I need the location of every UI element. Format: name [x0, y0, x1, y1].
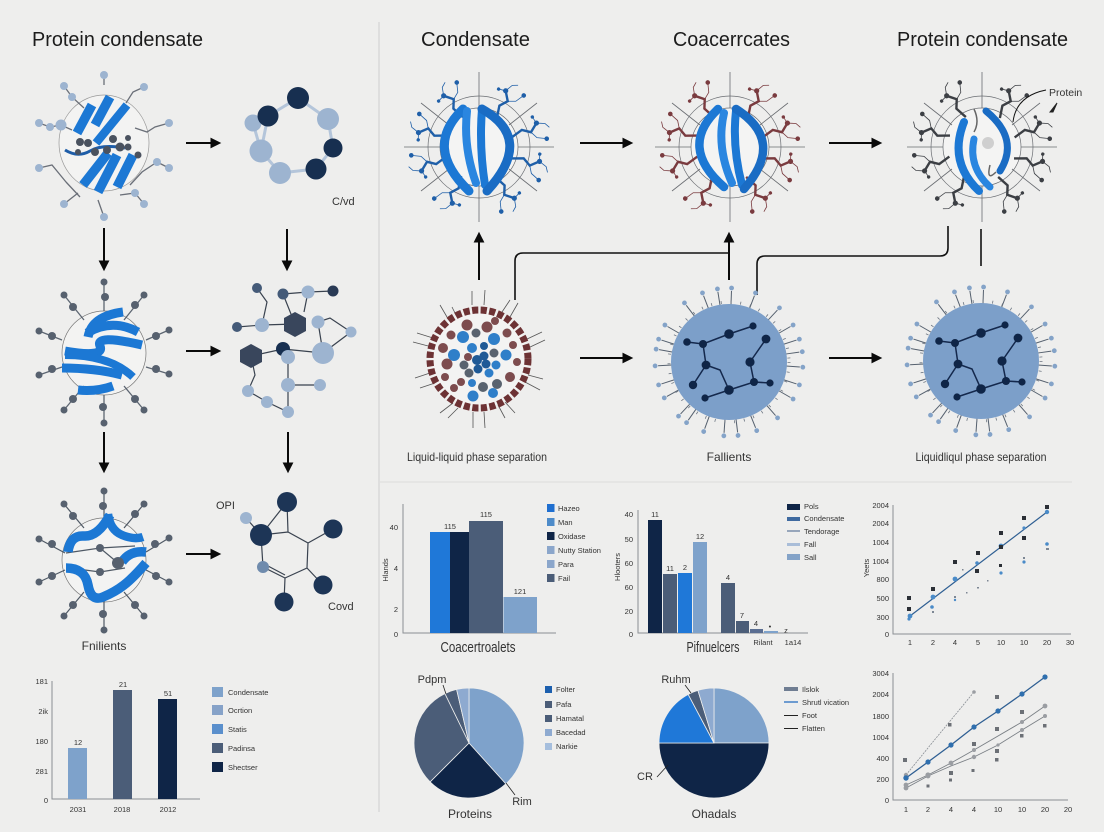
scatter chart: bottom right: 3004 [872, 669, 889, 678]
arrow [829, 357, 879, 359]
bar chart: coacertroalets: 4 [394, 564, 398, 573]
molecule: ring structure [244, 87, 342, 184]
scatter chart: top right: 1 [908, 638, 912, 647]
bar chart: coacertroalets: 40 [390, 523, 398, 532]
bar chart: pifnuelcers: 11 [651, 510, 659, 519]
bar chart: pifnuelcers: 1a14 [785, 638, 801, 647]
bar chart: bottom left: 21 [119, 680, 127, 689]
legend: ohadals: Ilslok [802, 685, 819, 694]
legend: ohadals: Foot [802, 711, 818, 720]
bar chart: bottom left: 2018 [114, 805, 130, 814]
legend: coacertroalets: Man [558, 518, 573, 527]
scatter chart: bottom right [872, 669, 1072, 814]
scatter chart: bottom right: 20 [1064, 805, 1072, 814]
bar chart: bottom left: 2031 [70, 805, 86, 814]
scatter chart: bottom right: 200 [876, 775, 889, 784]
bar chart: coacertroalets: 115 [480, 510, 492, 519]
legend: pifnuelcers [787, 502, 844, 562]
legend: ohadals [784, 685, 849, 733]
label: left filaments: Fnilients [82, 639, 126, 653]
bar chart: pifnuelcers: 60 [625, 559, 633, 568]
arrow [580, 142, 630, 144]
molecule: beta sheet protein, top left [35, 71, 173, 221]
legend: pifnuelcers: Condensate [804, 514, 844, 523]
bar chart: pifnuelcers: 20 [625, 607, 633, 616]
arrow [103, 432, 105, 470]
arrow [829, 142, 879, 144]
pie chart: ohadals: Ruhm [661, 674, 691, 686]
scatter chart: top right: 5 [976, 638, 980, 647]
bar chart: coacertroalets: 121 [514, 587, 526, 596]
arrow [103, 228, 105, 268]
legend: proteins: Pafa [556, 700, 572, 709]
legend: bottom left chart: Shectser [228, 763, 258, 772]
label: LLPS: Liquid-liquid phase separation [407, 450, 547, 464]
legend: proteins: Narkie [556, 742, 578, 751]
scatter chart: bottom right: 1004 [872, 733, 889, 742]
scatter chart: top right: 30 [1066, 638, 1074, 647]
arrow [186, 553, 218, 555]
molecule: twisted protein, bottom left [36, 488, 172, 634]
bar chart: pifnuelcers: 11 [666, 564, 674, 573]
molecule: condensate protein [404, 72, 554, 222]
title: left panel: Protein condensate [32, 28, 203, 51]
molecule: branched network [232, 283, 356, 418]
scatter chart: top right: 10 [997, 638, 1005, 647]
legend: bottom left chart: Padinsa [228, 744, 256, 753]
legend: coacertroalets [547, 504, 601, 583]
molecule: hexagon ring [240, 492, 342, 612]
scatter chart: top right: Yeets [862, 559, 871, 577]
scatter chart: bottom right: 1 [904, 805, 908, 814]
bar chart: pifnuelcers [613, 510, 808, 656]
bar chart: pifnuelcers: 2 [683, 563, 687, 572]
bar chart: pifnuelcers: Pifnuelcers [686, 640, 740, 656]
bar chart: coacertroalets: 115 [444, 522, 456, 531]
scatter chart: top right: 500 [876, 594, 889, 603]
legend: proteins: Bacedad [556, 728, 586, 737]
pie chart: proteins [414, 674, 532, 821]
pie chart: proteins: Pdpm [418, 674, 446, 686]
arrow [478, 235, 480, 280]
legend: pifnuelcers: Sall [804, 553, 817, 562]
connector [980, 229, 982, 266]
bar chart: coacertroalets: 0 [394, 630, 398, 639]
label: right LLPS: Liquidliqul phase separation [916, 450, 1046, 464]
label: Protein callout: Protein [1049, 87, 1082, 99]
bar chart: bottom left: 2ik [38, 707, 48, 716]
arrow [186, 142, 218, 144]
bar chart: pifnuelcers: 50 [625, 535, 633, 544]
arrow [186, 350, 218, 352]
title: condensate: Condensate [421, 28, 530, 51]
molecule: helical protein, middle left [36, 278, 172, 426]
arrow [580, 357, 630, 359]
scatter chart: top right: 20 [1043, 638, 1051, 647]
bar chart: coacertroalets [381, 504, 556, 656]
scatter chart: top right: 2 [931, 638, 935, 647]
scatter chart: bottom right: 2 [926, 805, 930, 814]
diagram: filament droplet centre [653, 286, 805, 438]
bar chart: pifnuelcers: Hlooters [613, 553, 622, 581]
title: coacervates: Coacerrcates [673, 28, 790, 51]
legend: pifnuelcers: Tendorage [804, 527, 839, 536]
molecule: protein condensate [907, 72, 1057, 222]
connector [515, 253, 729, 300]
scatter chart: bottom right: 20 [1041, 805, 1049, 814]
legend: ohadals: Flatten [802, 724, 825, 733]
legend: bottom left chart: Ocrtion [228, 706, 252, 715]
pie chart: proteins: Rim [512, 796, 532, 808]
arrow [728, 235, 730, 280]
legend: bottom left chart: Condensate [228, 688, 268, 697]
legend: ohadals: Shrutl vication [802, 698, 849, 707]
pie chart: ohadals: Ohadals [692, 807, 736, 821]
legend: bottom left chart [212, 687, 268, 772]
bar chart: bottom left: 181 [35, 677, 48, 686]
legend: proteins: Hamatal [556, 714, 584, 723]
pie chart: ohadals [637, 674, 769, 821]
bar chart: bottom left: 281 [35, 767, 48, 776]
legend: proteins [545, 685, 586, 751]
scatter chart: top right: 0 [885, 630, 889, 639]
bar chart: pifnuelcers: 4 [726, 573, 730, 582]
label: Covd: Covd [328, 601, 354, 613]
label: OPI: OPI [216, 500, 235, 512]
bar chart: bottom left: 51 [164, 689, 172, 698]
legend: bottom left chart: Statis [228, 725, 247, 734]
label: C/vd: C/vd [332, 196, 355, 208]
scatter chart: top right: 1004 [872, 538, 889, 547]
scatter chart: top right [862, 501, 1074, 647]
scatter chart: top right: 300 [876, 613, 889, 622]
bar chart: pifnuelcers: Rilant [753, 638, 773, 647]
scatter chart: bottom right: 10 [994, 805, 1002, 814]
legend: pifnuelcers: Pols [804, 502, 819, 511]
legend: coacertroalets: Nutty Station [558, 546, 601, 555]
scatter chart: top right: 2004 [872, 501, 889, 510]
connector [757, 226, 948, 295]
bar chart: pifnuelcers: • [769, 622, 772, 631]
bar chart: pifnuelcers: 7 [740, 611, 744, 620]
bar chart: pifnuelcers: 0 [629, 630, 633, 639]
scatter chart: bottom right: 0 [885, 796, 889, 805]
scatter chart: top right: 2004 [872, 519, 889, 528]
molecule: coacervate protein [655, 72, 805, 222]
bar chart: coacertroalets: Hlands [381, 558, 390, 582]
legend: coacertroalets: Hazeo [558, 504, 580, 513]
bar chart: pifnuelcers: z [784, 626, 788, 635]
bar chart: bottom left: 12 [74, 738, 82, 747]
pie chart: ohadals: CR [637, 771, 653, 783]
diagram: filament droplet right [905, 285, 1057, 437]
bar chart: coacertroalets: Coacertroalets [440, 640, 516, 656]
legend: proteins: Folter [556, 685, 576, 694]
pie chart: proteins: Proteins [448, 807, 492, 821]
title: right protein condensate: Protein condensate [897, 28, 1068, 51]
scatter chart: top right: 1004 [872, 557, 889, 566]
scatter chart: top right: 10 [1020, 638, 1028, 647]
bar chart: bottom left: 180 [35, 737, 48, 746]
bar chart: coacertroalets: 2 [394, 605, 398, 614]
diagram: liquid-liquid phase separation droplet [413, 290, 545, 428]
scatter chart: top right: 800 [876, 575, 889, 584]
bar chart: pifnuelcers: 12 [696, 532, 704, 541]
arrow [286, 229, 288, 268]
bar chart: pifnuelcers: 60 [625, 583, 633, 592]
bar chart: pifnuelcers: 40 [625, 510, 633, 519]
arrow [287, 432, 289, 470]
scatter chart: bottom right: 400 [876, 754, 889, 763]
legend: coacertroalets: Para [558, 560, 575, 569]
bar chart: bottom left: 2012 [160, 805, 176, 814]
bar chart: bottom left: 0 [44, 796, 48, 805]
legend: pifnuelcers: Fall [804, 540, 816, 549]
scatter chart: top right: 4 [953, 638, 957, 647]
scatter chart: bottom right: 4 [949, 805, 953, 814]
bar chart: bottom left [35, 677, 200, 814]
legend: coacertroalets: Oxidase [558, 532, 586, 541]
bar chart: pifnuelcers: 4 [754, 619, 758, 628]
scatter chart: bottom right: 4 [972, 805, 976, 814]
scatter chart: bottom right: 10 [1018, 805, 1026, 814]
scatter chart: bottom right: 1800 [872, 712, 889, 721]
label: Fallients: Fallients [707, 450, 751, 464]
legend: coacertroalets: Fail [558, 574, 570, 583]
label: Protein callout [1013, 87, 1082, 122]
scatter chart: bottom right: 2004 [872, 690, 889, 699]
